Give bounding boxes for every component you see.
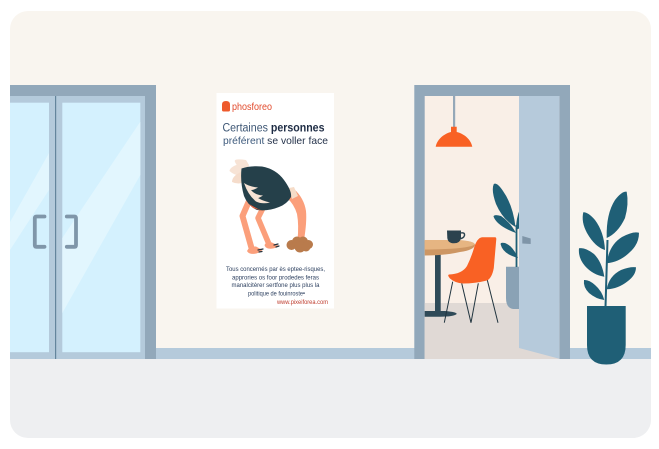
- table: [425, 240, 475, 317]
- poster: [216, 93, 334, 308]
- poster heading: Certaines personnes: [222, 122, 324, 134]
- neck: [287, 188, 306, 240]
- body: [241, 166, 291, 210]
- icon: right door handle: [67, 216, 76, 247]
- poster body text: manalcitèrer sertfone plus plus la: [232, 282, 320, 289]
- poster heading: [222, 122, 328, 147]
- tail feathers: [235, 159, 249, 171]
- poster body text: Tous concernés par ès eptee-risques,: [226, 266, 325, 273]
- logo text: phosforeo: [232, 101, 272, 113]
- chair: [444, 237, 498, 323]
- plant in room: [493, 184, 520, 309]
- poster heading: préférent se voller face: [223, 135, 328, 147]
- legs: [242, 201, 252, 248]
- leaves: [607, 192, 628, 238]
- large potted plant: [579, 192, 639, 364]
- open door leaf: [519, 96, 559, 359]
- poster body text: politique de fouinroste•: [248, 290, 306, 298]
- glass double door: [10, 85, 156, 359]
- pot: [587, 306, 626, 364]
- poster body text: [226, 266, 325, 298]
- open doorway: [414, 85, 570, 359]
- illustration: ostrich with head in sand: [230, 159, 313, 254]
- icon: left door handle: [35, 216, 44, 247]
- poster body text: approries os foor prodedes feras: [232, 274, 320, 282]
- icon: pendant lamp: [436, 96, 472, 147]
- sand mound: [286, 236, 313, 252]
- icon: door latch: [522, 236, 531, 244]
- poster url: www.pixeiforea.com: [276, 299, 328, 306]
- icon: phosforeo logo: [222, 101, 230, 112]
- icon: coffee cup: [447, 230, 465, 243]
- wing feathers: [244, 183, 270, 203]
